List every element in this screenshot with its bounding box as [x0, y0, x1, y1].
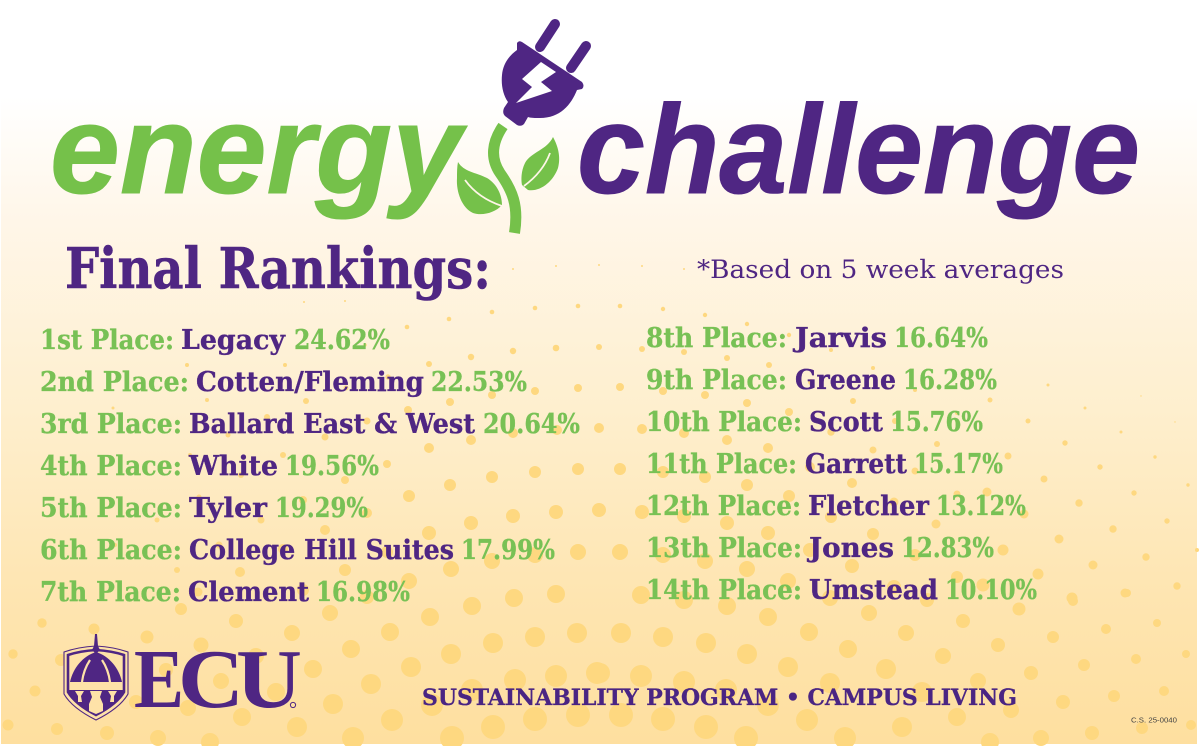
rank 12: Fletcher [808, 490, 929, 522]
rank 3: 3rd Place: [40, 408, 182, 440]
rank 14: 10.10% [945, 574, 1037, 606]
logo: ECU wordmark: C [178, 633, 244, 726]
rank 7 [40, 576, 410, 608]
logo: ECU wordmark: E [134, 633, 184, 726]
rank 10 [646, 406, 983, 438]
rank 5 [40, 492, 368, 524]
logo: ECU wordmark: U [236, 633, 302, 726]
footer: job code: C.S. 25-0040 [1131, 716, 1177, 724]
rank 7: 7th Place: [40, 576, 181, 608]
rank 14: Umstead [809, 574, 938, 606]
rank 4: 4th Place: [40, 450, 182, 482]
rank 13: 12.83% [901, 532, 994, 564]
rank 4 [40, 450, 379, 482]
rank 2: 2nd Place: [40, 366, 189, 398]
rank 14: 14th Place: [646, 574, 802, 606]
rank 5: Tyler [189, 492, 268, 524]
rank 13 [646, 532, 994, 564]
rank 11: Garrett [805, 448, 907, 480]
rank 10: 15.76% [890, 406, 983, 438]
rank 10: 10th Place: [646, 406, 802, 438]
rankings list: left column [40, 324, 580, 608]
rank 9: 9th Place: [646, 364, 787, 396]
rank 5: 19.29% [275, 492, 368, 524]
rank 6: 17.99% [461, 534, 555, 566]
rank 14 [646, 574, 1037, 606]
rank 6: College Hill Suites [189, 534, 454, 566]
icon: ECU cupola shield [64, 634, 128, 720]
rank 3: Ballard East & West [189, 408, 475, 440]
rank 13: 13th Place: [646, 532, 802, 564]
heading: final rankings: Final Rankings: [65, 236, 491, 302]
icon: plug with leaf stem [457, 24, 586, 233]
rank 4: 19.56% [285, 450, 379, 482]
rank 11: 11th Place: [646, 448, 797, 480]
rank 8: 16.64% [894, 322, 988, 354]
rank 4: White [188, 450, 278, 482]
rank 8 [646, 322, 988, 354]
rank 3 [40, 408, 580, 440]
footer: program name: SUSTAINABILITY PROGRAM • CAMPUS LIVING [422, 685, 1017, 711]
rank 8: Jarvis [792, 322, 887, 354]
rank 10: Scott [809, 406, 883, 438]
title: challenge: challenge [577, 79, 1140, 220]
rank 12 [646, 490, 1026, 522]
rank 1: Legacy [181, 324, 286, 356]
note: based on averages: *Based on 5 week averages [697, 255, 1064, 284]
rank 2 [40, 366, 527, 398]
rank 5: 5th Place: [40, 492, 182, 524]
rank 2: Cotten/Fleming [196, 366, 424, 398]
rank 6 [40, 534, 555, 566]
rank 12: 13.12% [936, 490, 1026, 522]
rank 6: 6th Place: [40, 534, 182, 566]
rank 2: 22.53% [431, 366, 527, 398]
rank 3: 20.64% [483, 408, 580, 440]
rank 9 [646, 364, 997, 396]
rankings list: right column [646, 322, 1037, 606]
rank 7: Clement [188, 576, 309, 608]
rank 7: 16.98% [316, 576, 410, 608]
rank 9: 16.28% [903, 364, 997, 396]
rank 12: 12th Place: [646, 490, 801, 522]
logo: ECU wordmark [134, 633, 302, 726]
rank 13: Jones [806, 532, 894, 564]
title: energy: energy [50, 79, 468, 220]
rank 1: 1st Place: [40, 324, 174, 356]
rank 9: Greene [795, 364, 896, 396]
rank 8: 8th Place: [646, 322, 787, 354]
rank 1 [40, 324, 390, 356]
rank 11: 15.17% [914, 448, 1003, 480]
rank 1: 24.62% [294, 324, 390, 356]
rank 11 [646, 448, 1003, 480]
